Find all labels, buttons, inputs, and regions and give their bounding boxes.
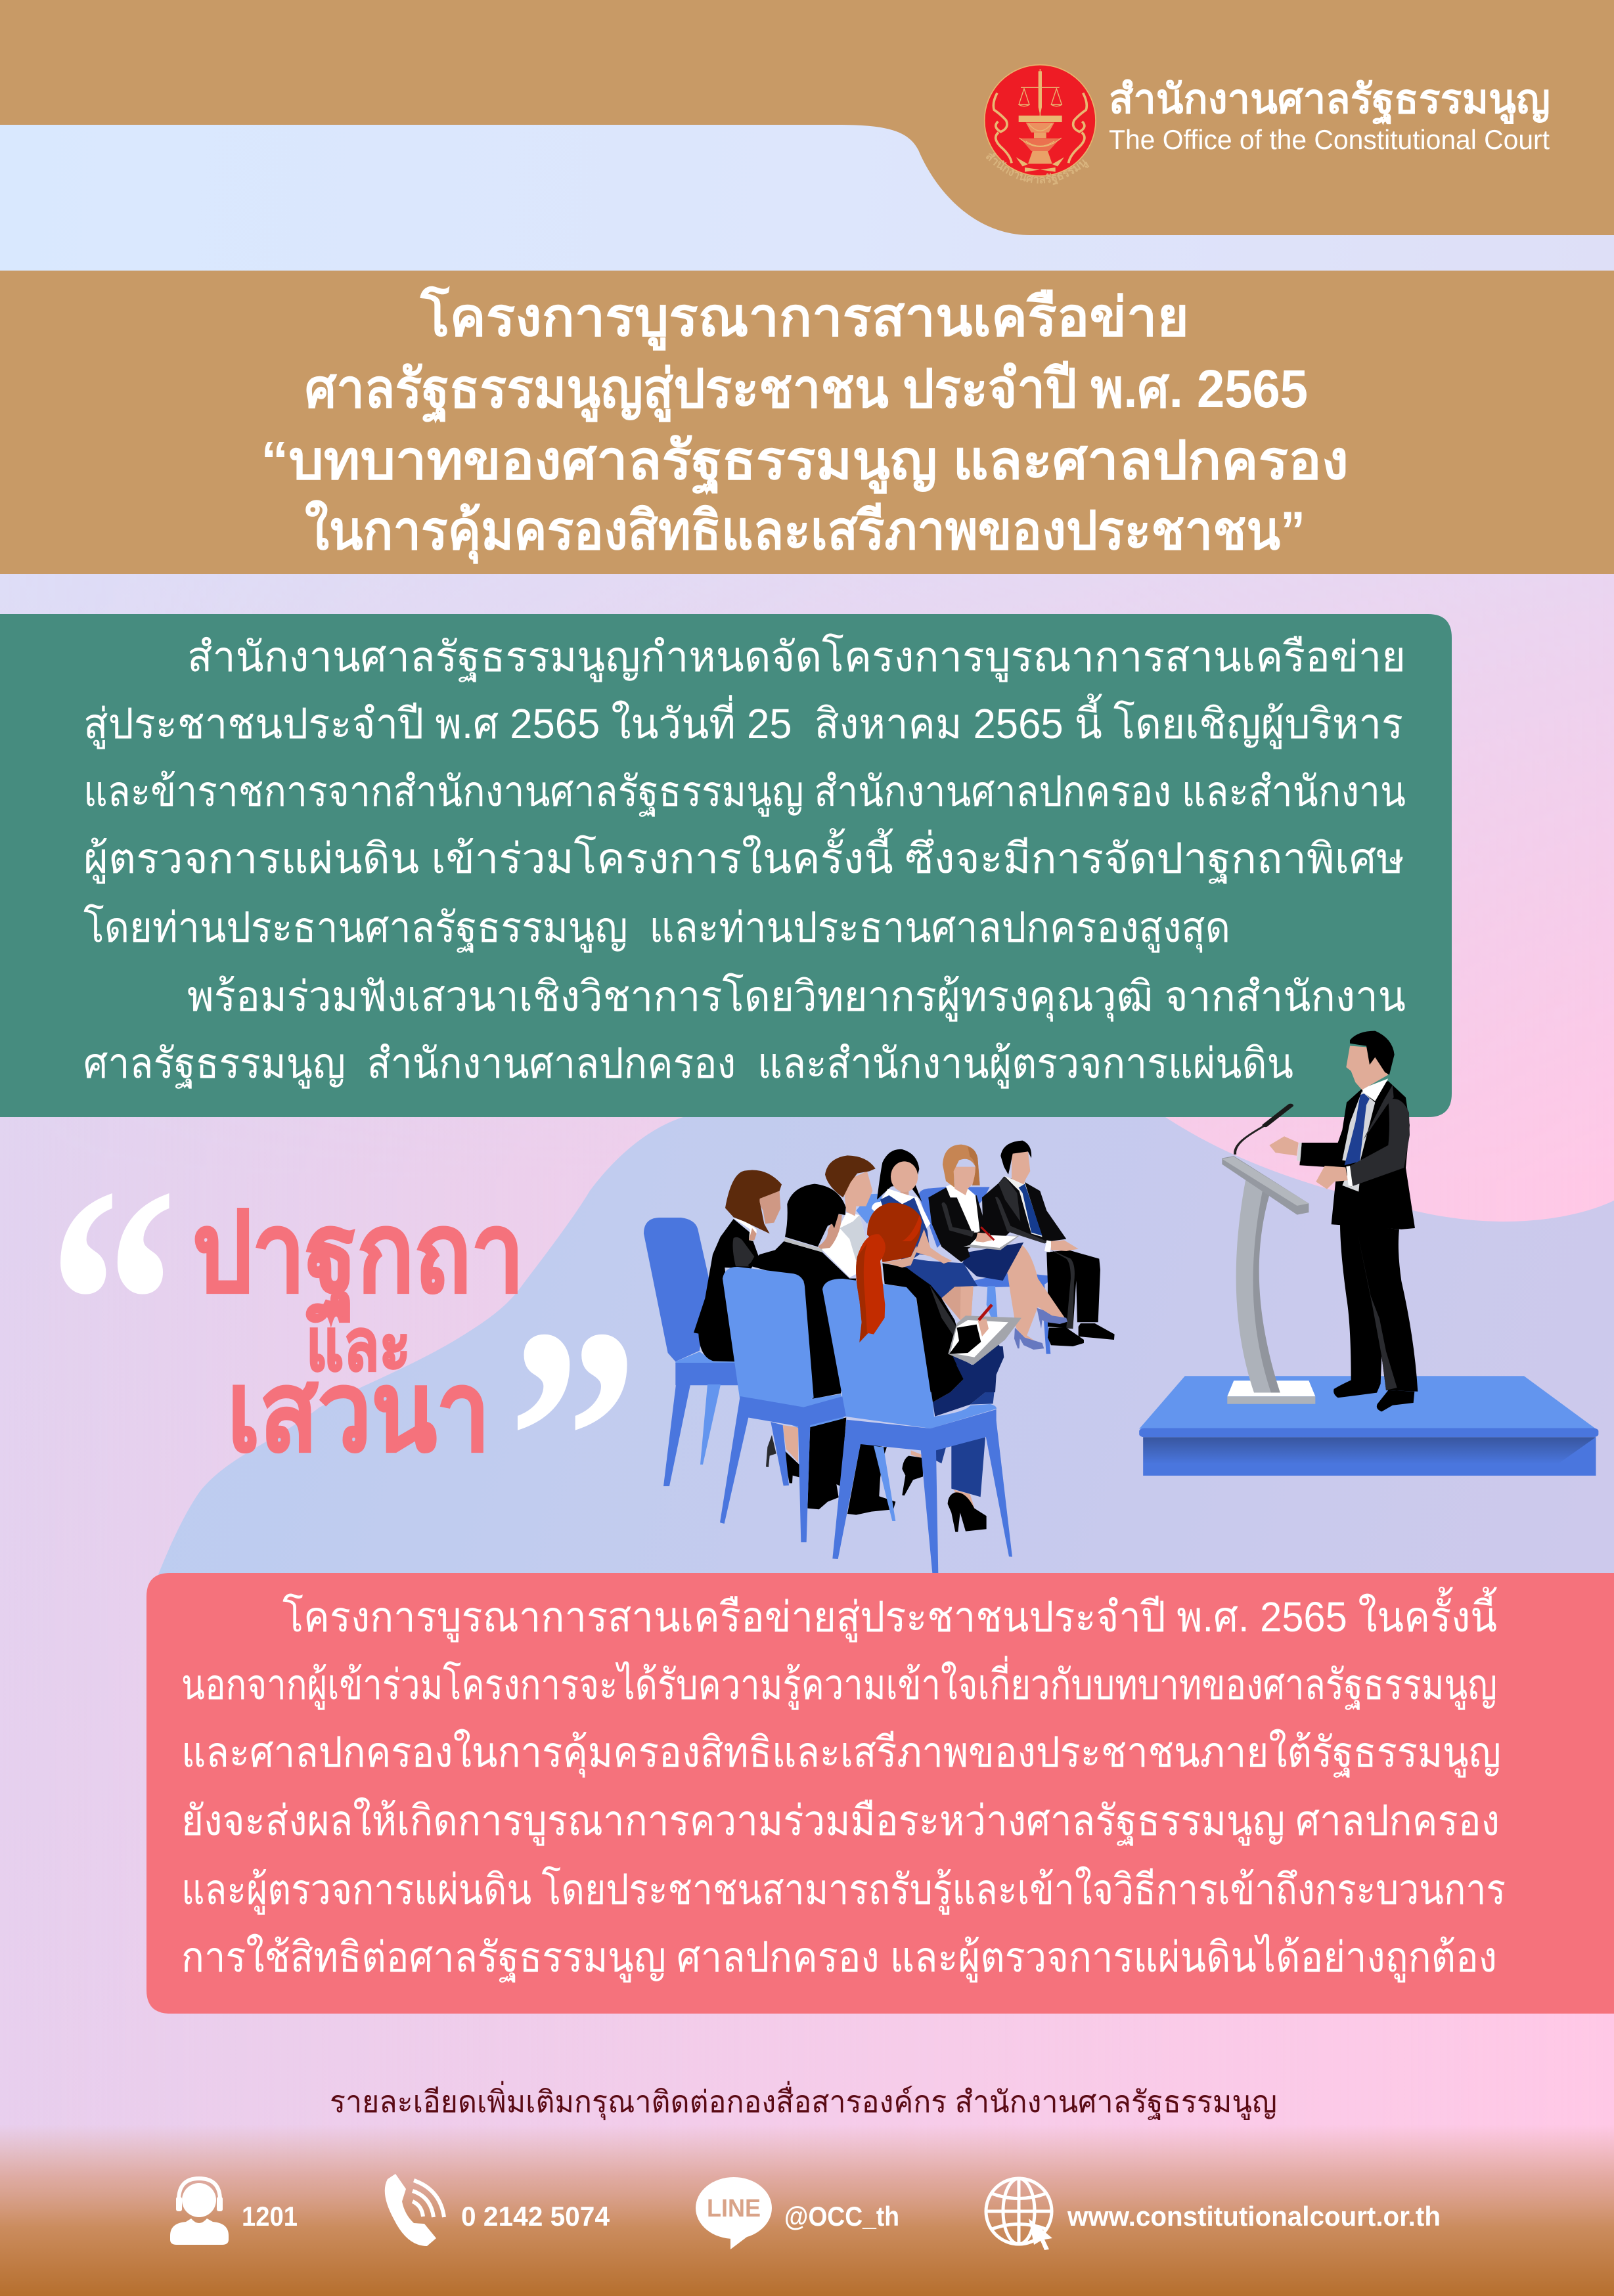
opening quote mark: “ bbox=[48, 1119, 177, 1488]
introduction text: สำนักงานศาลรัฐธรรมนูญกำหนดจัดโครงการบูรณาการสานเครือข่าย bbox=[187, 633, 1406, 682]
contact: telephone bbox=[385, 2174, 610, 2246]
introduction text: ผู้ตรวจการแผ่นดิน เข้าร่วมโครงการในครั้งนี้ ซึ่งจะมีการจัดปาฐกถาพิเศษ bbox=[83, 828, 1404, 884]
person: man at far right bbox=[982, 1141, 1115, 1346]
person: woman with black hair bbox=[872, 1149, 977, 1320]
contact: hotline bbox=[170, 2178, 298, 2245]
introduction text: และข้าราชการจากสำนักงานศาลรัฐธรรมนูญ สำนักงานศาลปกครอง และสำนักงาน bbox=[83, 768, 1406, 817]
summary text: ยังจะส่งผลให้เกิดการบูรณาการความร่วมมือระหว่างศาลรัฐธรรมนูญ ศาลปกครอง bbox=[181, 1797, 1500, 1846]
person: woman with auburn hair bbox=[928, 1145, 1067, 1350]
summary text bbox=[181, 1587, 1506, 1983]
introduction text: พร้อมร่วมฟังเสวนาเชิงวิชาการโดยวิทยากรผู้ทรงคุณวุฒิ จากสำนักงาน bbox=[187, 973, 1406, 1022]
panel: green introduction bbox=[0, 614, 1452, 1117]
closing quote mark: ” bbox=[508, 1262, 639, 1614]
summary text: การใช้สิทธิต่อศาลรัฐธรรมนูญ ศาลปกครอง และผู้ตรวจการแผ่นดินได้อย่างถูกต้อง bbox=[181, 1933, 1497, 1983]
person: woman with brown bob hair bbox=[694, 1170, 782, 1361]
speaker bbox=[1269, 1031, 1418, 1411]
title text: ศาลรัฐธรรมนูญสู่ประชาชน ประจำปี พ.ศ. 2565 bbox=[305, 359, 1308, 424]
person: woman with red ponytail bbox=[856, 1203, 1021, 1417]
icon: headset agent bbox=[170, 2178, 229, 2245]
title band bbox=[0, 271, 1614, 574]
heading words: และ bbox=[306, 1305, 411, 1386]
heading words bbox=[192, 1191, 524, 1474]
chair: rear left bbox=[644, 1218, 738, 1486]
introduction text: โดยท่านประธานศาลรัฐธรรมนูญ และท่านประธานศาลปกครองสูงสุด bbox=[83, 904, 1230, 953]
organisation name: The Office of the Constitutional Court bbox=[1109, 124, 1550, 155]
heading words: ปาฐกถา bbox=[192, 1191, 524, 1325]
contact: website bbox=[986, 2178, 1441, 2250]
lectern bbox=[1222, 1105, 1315, 1404]
illustration: speaker and seated audience bbox=[644, 1031, 1598, 1573]
person: man from behind bbox=[748, 1184, 856, 1399]
summary text: และศาลปกครองในการคุ้มครองสิทธิและเสรีภาพของประชาชนภายใต้รัฐธรรมนูญ bbox=[181, 1729, 1501, 1778]
title text: “บทบาทของศาลรัฐธรรมนูญ และศาลปกครอง bbox=[261, 431, 1349, 496]
heading: lecture and discussion bbox=[48, 1119, 639, 1614]
footer gradient band bbox=[0, 2125, 1614, 2296]
title text: โครงการบูรณาการสานเครือข่าย bbox=[420, 286, 1189, 351]
background blob bbox=[152, 1117, 1614, 1589]
audience: back row chairs bbox=[856, 1187, 1079, 1354]
logo: Constitutional Court seal: สำนักงานศาลรัฐธรรมนูญ bbox=[986, 153, 1089, 185]
introduction text: ศาลรัฐธรรมนูญ สำนักงานศาลปกครอง และสำนักงานผู้ตรวจการแผ่นดิน bbox=[83, 1040, 1293, 1089]
contact: hotline: 1201 bbox=[242, 2201, 298, 2232]
icon: globe with cursor bbox=[986, 2178, 1052, 2250]
contact: website: www.constitutionalcourt.or.th bbox=[1067, 2201, 1441, 2232]
introduction text bbox=[83, 633, 1406, 1089]
summary text: โครงการบูรณาการสานเครือข่ายสู่ประชาชนประจำปี พ.ศ. 2565 ในครั้งนี้ bbox=[282, 1587, 1498, 1643]
contact: telephone: 0 2142 5074 bbox=[461, 2201, 610, 2232]
organisation name: สำนักงานศาลรัฐธรรมนูญ bbox=[1109, 77, 1550, 125]
panel: red summary bbox=[146, 1573, 1614, 2014]
person: man with brown hair bbox=[821, 1155, 876, 1277]
title text: ในการคุ้มครองสิทธิและเสรีภาพของประชาชน” bbox=[305, 500, 1305, 564]
chair: front right bbox=[822, 1279, 1012, 1573]
contact: LINE bbox=[696, 2177, 899, 2249]
organisation name bbox=[1109, 77, 1550, 155]
person: lower legs under chairs bbox=[766, 1417, 987, 1532]
stage bbox=[1139, 1376, 1598, 1476]
icon: LINE speech bubble: LINE bbox=[707, 2195, 761, 2222]
heading words: เสวนา bbox=[227, 1350, 490, 1474]
header band bbox=[0, 0, 1614, 235]
icon: LINE speech bubble bbox=[696, 2177, 772, 2249]
title text bbox=[261, 286, 1349, 564]
contact: LINE: @OCC_th bbox=[784, 2201, 899, 2232]
icon: telephone handset bbox=[385, 2174, 444, 2246]
introduction text: สู่ประชาชนประจำปี พ.ศ 2565 ในวันที่ 25 สิงหาคม 2565 นี้ โดยเชิญผู้บริหาร bbox=[83, 694, 1403, 749]
contact note: รายละเอียดเพิ่มเติมกรุณาติดต่อกองสื่อสารองค์กร สำนักงานศาลรัฐธรรมนูญ bbox=[330, 2081, 1277, 2121]
chair: front middle bbox=[720, 1267, 895, 1542]
